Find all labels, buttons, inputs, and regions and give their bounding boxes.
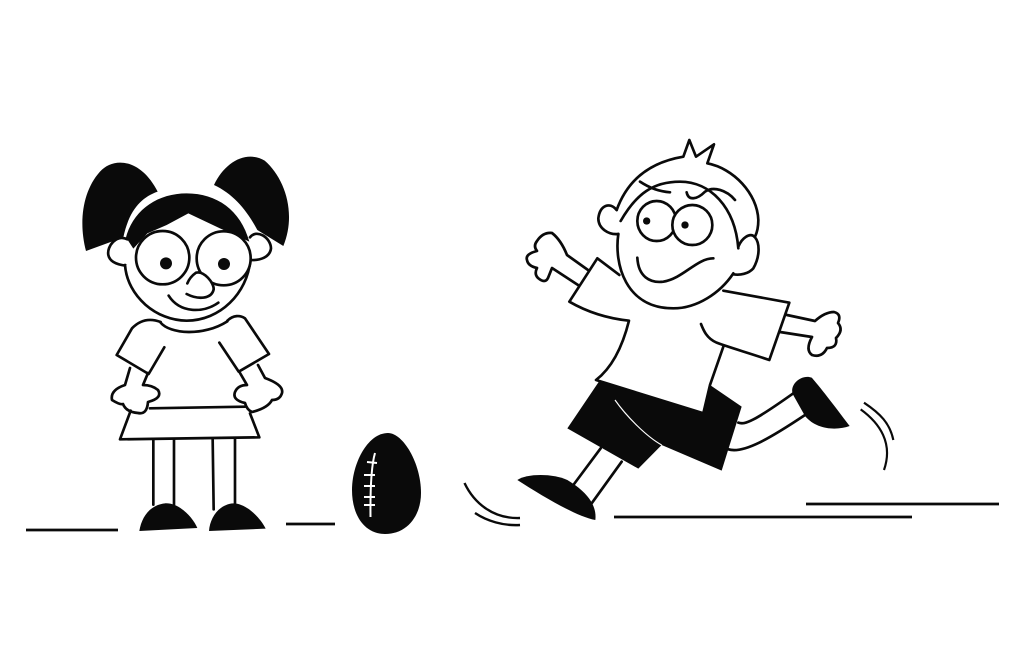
girl skirt [120, 407, 259, 439]
boy eyes [637, 201, 712, 245]
boy ears [598, 205, 759, 275]
boy front leg [573, 448, 622, 503]
girl nose [187, 272, 214, 298]
boy head and hair [617, 140, 758, 308]
boy mouth [637, 258, 713, 282]
girl legs [153, 439, 235, 509]
boy shorts [567, 381, 742, 471]
girl hair [126, 193, 249, 249]
rugby ball [352, 433, 421, 534]
girl character [82, 157, 289, 531]
girl head [125, 260, 250, 321]
ball stitches [364, 453, 377, 517]
girl right hand [234, 365, 282, 412]
motion lines by front foot [464, 483, 520, 525]
girl glasses and eyes [136, 231, 251, 285]
girl ears [108, 234, 271, 266]
boy left arm and hand [527, 233, 588, 285]
girl shoes [139, 503, 266, 531]
boy shirt [569, 258, 789, 413]
boy front shoe [517, 475, 596, 520]
boy character [517, 140, 893, 520]
boy right arm and hand [780, 312, 841, 356]
ground lines [26, 504, 999, 530]
girl left hand [112, 368, 159, 413]
boy back shoe [792, 377, 850, 429]
shorts highlight [615, 400, 662, 445]
girl smile [169, 296, 218, 310]
boy eyebrows [640, 182, 735, 200]
motion lines by back foot [861, 403, 893, 470]
boy back leg [728, 393, 805, 450]
girl shirt [117, 316, 269, 374]
girl pigtails [82, 157, 289, 251]
